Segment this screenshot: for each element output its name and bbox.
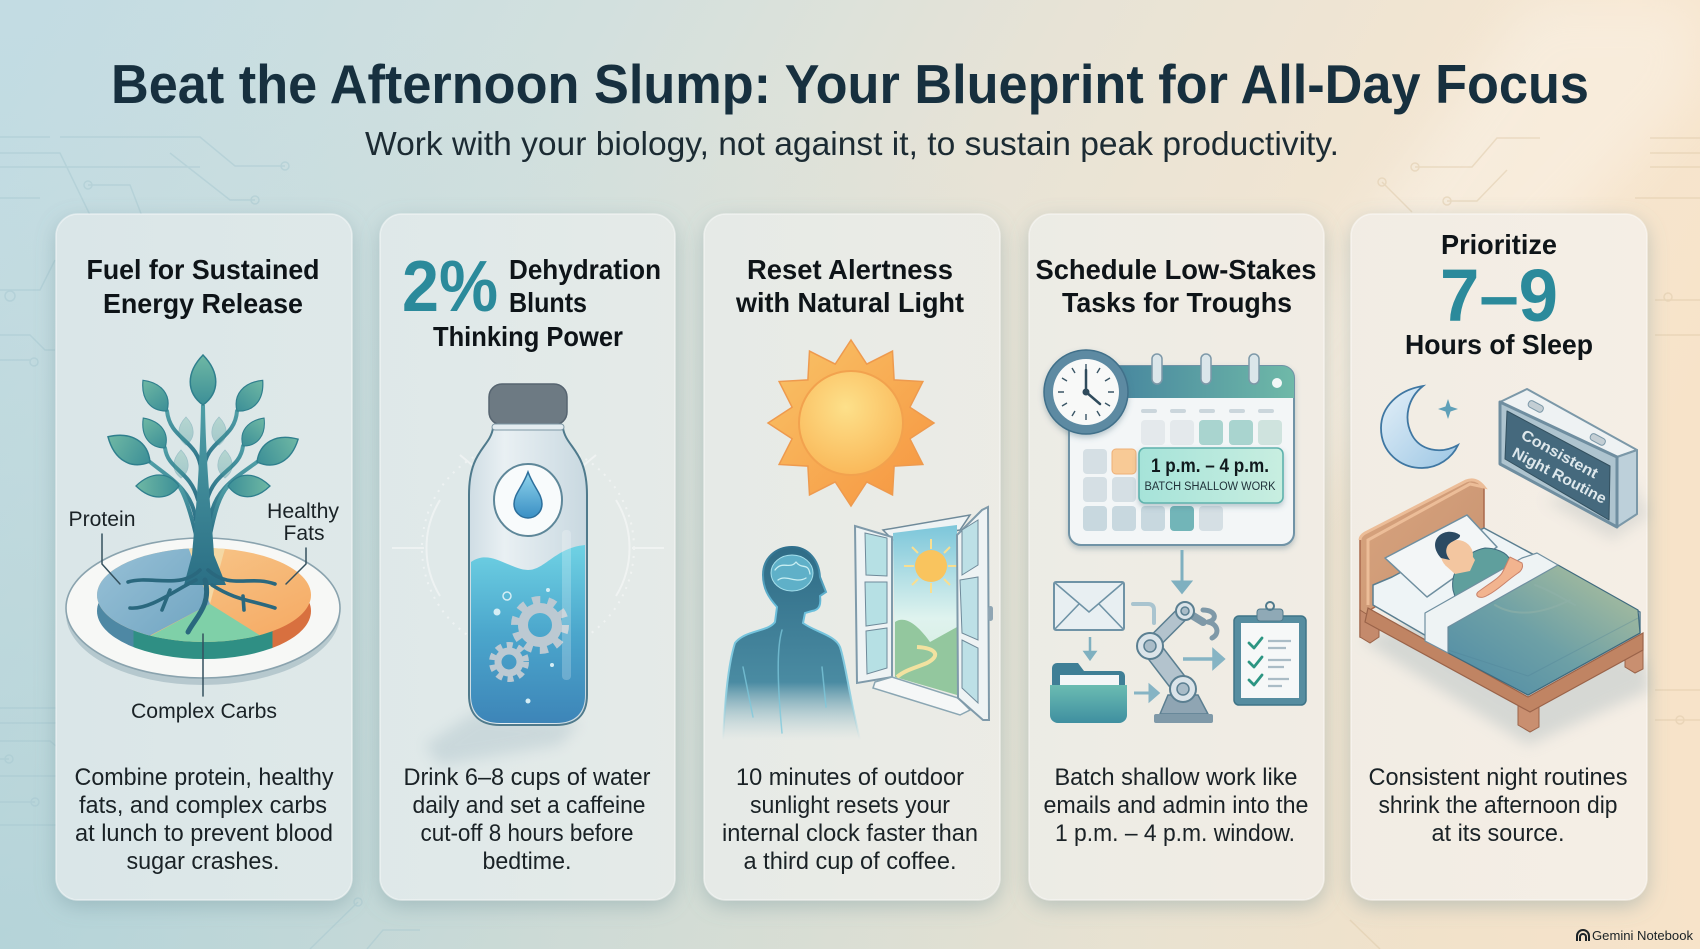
icon: folder bbox=[1050, 663, 1127, 723]
heading: schedule: Tasks for Troughs bbox=[1062, 287, 1292, 318]
heading: prioritize 7-9 hours of sleep: Hours of Sleep bbox=[1405, 329, 1593, 360]
heading: fuel bbox=[86, 254, 320, 319]
icon: open window bbox=[855, 507, 993, 720]
label: protein bbox=[68, 508, 136, 584]
body text: fuel: at lunch to prevent blood bbox=[75, 820, 333, 847]
panel: fuel for sustained energy bbox=[56, 214, 352, 900]
callout: 1 p.m. to 4 p.m.: 1 p.m. – 4 p.m. bbox=[1151, 456, 1269, 477]
body text: sleep: at its source. bbox=[1432, 820, 1564, 847]
icon: sun bbox=[768, 340, 934, 506]
icon: calendar bbox=[1069, 354, 1294, 545]
arrow: bent to robot arm bbox=[1133, 604, 1154, 623]
heading: natural light bbox=[735, 254, 964, 318]
heading: prioritize 7-9 hours of sleep bbox=[1405, 229, 1593, 360]
icon: person sleeping in bed bbox=[1360, 480, 1650, 745]
body text: schedule bbox=[1044, 764, 1308, 847]
body text: natural light bbox=[722, 764, 978, 875]
body text: fuel: fats, and complex carbs bbox=[79, 792, 327, 819]
panel: schedule tasks bbox=[1029, 214, 1324, 900]
heading: schedule: Schedule Low-Stakes bbox=[1036, 254, 1316, 285]
callout: 1 p.m. to 4 p.m. bbox=[1139, 448, 1283, 503]
body text: natural light: a third cup of coffee. bbox=[744, 848, 956, 875]
body text: natural light: sunlight resets your bbox=[750, 792, 950, 819]
watermark: gemini notebook: Gemini Notebook bbox=[1592, 929, 1694, 943]
heading: natural light: with Natural Light bbox=[735, 287, 964, 318]
body text: hydration: daily and set a caffeine bbox=[412, 792, 646, 819]
title: Beat the Afternoon Slump: Your Blueprint for All-Day Focus bbox=[111, 53, 1589, 115]
icon: robot arm bbox=[1137, 602, 1217, 723]
body text: hydration: Drink 6–8 cups of water bbox=[404, 764, 650, 791]
body text: fuel bbox=[74, 764, 334, 875]
arrow: folder to robot arm bbox=[1134, 686, 1158, 700]
body text: sleep: shrink the afternoon dip bbox=[1378, 792, 1618, 819]
icon: person with brain bbox=[723, 547, 860, 740]
icon: plate with tree and roots bbox=[60, 355, 340, 685]
body text: schedule: emails and admin into the bbox=[1044, 792, 1308, 819]
panel: natural light bbox=[704, 214, 1000, 900]
panel: hydration bbox=[380, 214, 675, 900]
body text: natural light: internal clock faster than bbox=[722, 820, 978, 847]
icon: envelope bbox=[1054, 582, 1124, 630]
arrow: robot arm to checklist bbox=[1183, 651, 1223, 667]
label: healthy fats: Healthy bbox=[267, 500, 340, 523]
icon: night routine display bbox=[1500, 389, 1650, 540]
icon: moon and star bbox=[1381, 386, 1458, 468]
body text: fuel: sugar crashes. bbox=[126, 848, 280, 875]
label: complex carbs: Complex Carbs bbox=[131, 700, 277, 723]
body text: sleep: Consistent night routines bbox=[1368, 764, 1628, 791]
body text: schedule: 1 p.m. – 4 p.m. window. bbox=[1055, 820, 1295, 847]
panel: sleep bbox=[1351, 214, 1650, 900]
arrow: envelope to folder bbox=[1085, 637, 1095, 659]
body text: hydration: bedtime. bbox=[482, 848, 572, 875]
heading: natural light: Reset Alertness bbox=[747, 254, 953, 285]
arrow: calendar to tasks bbox=[1174, 550, 1190, 592]
body text: hydration bbox=[404, 764, 650, 875]
heading: 2% dehydration bbox=[402, 247, 661, 352]
subtitle: Work with your biology, not against it, to sustain peak productivity. bbox=[365, 125, 1339, 162]
icon: water bottle with gears bbox=[392, 384, 664, 765]
callout: 1 p.m. to 4 p.m.: BATCH SHALLOW WORK bbox=[1144, 481, 1276, 493]
label: healthy fats: Fats bbox=[284, 522, 324, 545]
icon: night routine display: Consistent bbox=[1518, 427, 1601, 482]
body text: sleep bbox=[1368, 764, 1628, 847]
heading: 2% dehydration: Blunts bbox=[509, 287, 587, 318]
icon: checklist clipboard bbox=[1234, 602, 1306, 705]
heading: 2% dehydration: Thinking Power bbox=[433, 321, 623, 352]
label: protein: Protein bbox=[68, 508, 136, 531]
heading: fuel: Energy Release bbox=[103, 288, 303, 319]
heading: 2% dehydration: 2% bbox=[402, 247, 498, 327]
body text: fuel: Combine protein, healthy bbox=[74, 764, 334, 791]
heading: prioritize 7-9 hours of sleep: 7–9 bbox=[1440, 254, 1558, 337]
heading: 2% dehydration: Dehydration bbox=[509, 254, 661, 285]
icon: clock bbox=[1044, 350, 1128, 434]
body text: natural light: 10 minutes of outdoor bbox=[736, 764, 964, 791]
icon: night routine display: Night Routine bbox=[1509, 444, 1609, 508]
heading: prioritize 7-9 hours of sleep: Prioritize bbox=[1441, 229, 1557, 260]
heading: schedule bbox=[1036, 254, 1316, 318]
label: healthy fats bbox=[267, 500, 340, 584]
body text: hydration: cut-off 8 hours before bbox=[420, 820, 634, 847]
heading: fuel: Fuel for Sustained bbox=[86, 254, 320, 285]
body text: schedule: Batch shallow work like bbox=[1054, 764, 1298, 791]
